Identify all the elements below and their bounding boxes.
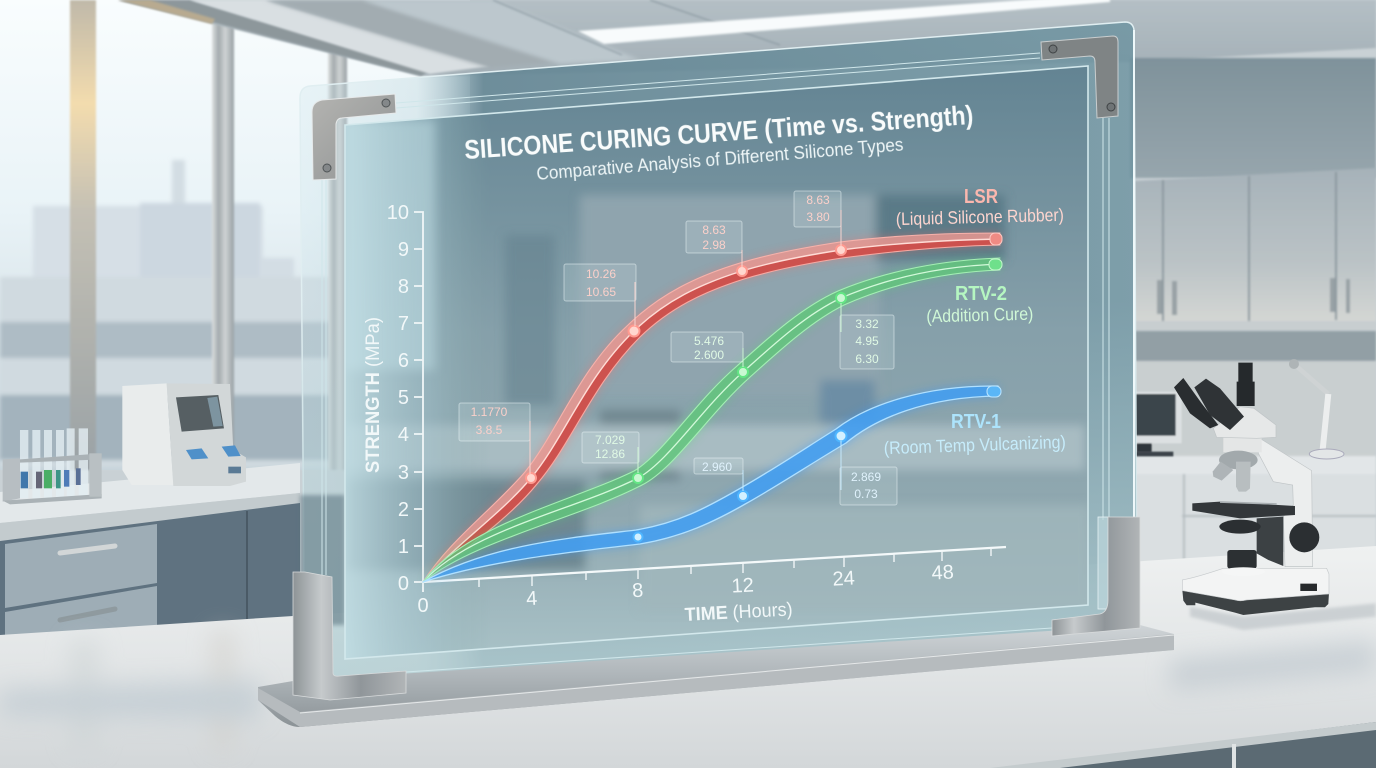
y axis: 7: [398, 313, 409, 335]
inner frame lines: [345, 66, 1088, 659]
y axis: 5: [398, 387, 409, 409]
y axis: 10: [387, 202, 409, 224]
callout: LSR 4h: 3.8.5: [476, 423, 503, 437]
callout: LSR 12h: 2.98: [702, 238, 726, 252]
wall cabinets: [1134, 168, 1376, 331]
callout: RTV-1 24h: 2.869: [851, 470, 881, 484]
bracket: top-left: [312, 94, 396, 180]
y axis: 0: [398, 573, 409, 595]
callout: LSR 24h: 8.63: [806, 193, 830, 207]
series label: RTV-2: RTV-2: [955, 283, 1007, 305]
inner chart surface: [340, 60, 1095, 665]
bracket: top-right: [1041, 36, 1118, 118]
callout: RTV-2 8h: 12.86: [595, 447, 625, 461]
series label: LSR: LSR: [964, 186, 998, 208]
ceiling: [118, 0, 1376, 76]
chart: strength vs time: [363, 100, 1066, 626]
backsplash and rear counter: [1134, 331, 1376, 574]
callout: RTV-1 24h: [840, 441, 897, 505]
callout: RTV-2 24h: 6.30: [855, 352, 879, 366]
callout: LSR 12h: 8.63: [702, 223, 726, 237]
bracket: bottom-right: [1052, 517, 1140, 636]
x axis: 4: [526, 588, 538, 610]
x axis label: TIME (Hours): [684, 599, 793, 626]
callout: RTV-2 8h: 7.029: [595, 433, 625, 447]
callout: RTV-2 24h: 3.32: [855, 317, 879, 331]
callout: RTV-2 24h: 4.95: [855, 334, 879, 348]
x axis: [417, 547, 1006, 617]
curve: RTV-2: [423, 258, 1002, 582]
callout: LSR 8h: [564, 264, 636, 326]
callout: RTV-2 12h: 2.600: [694, 348, 724, 362]
callout: LSR 24h: 3.80: [806, 210, 830, 224]
foreground counter: [0, 546, 1376, 768]
outer glass pane: [300, 22, 1137, 690]
monitor: [1135, 392, 1182, 456]
series label: RTV-1: RTV-1: [951, 411, 1001, 433]
window with skyline: [0, 0, 470, 470]
callout: LSR 8h: 10.26: [586, 267, 616, 281]
callout: RTV-1 12h: [694, 458, 743, 491]
callout: LSR 4h: [459, 403, 530, 474]
series label: LSR: [896, 186, 1064, 229]
callout: RTV-2 24h: [840, 303, 894, 369]
series label: RTV-1: [883, 411, 1066, 458]
subtitle: Comparative Analysis of Different Silicone Types: [536, 135, 904, 184]
callout: LSR 12h: [686, 221, 742, 267]
y axis: 6: [398, 350, 409, 372]
callout: LSR 8h: 10.65: [586, 285, 616, 299]
analyzer instrument: [122, 383, 246, 486]
curve: RTV-1: [423, 386, 1001, 582]
y axis: 4: [398, 424, 409, 446]
series label: LSR: (Liquid Silicone Rubber): [896, 205, 1064, 229]
callout: RTV-1 24h: 0.73: [854, 487, 878, 501]
y axis: 8: [398, 276, 409, 298]
series label: RTV-1: (Room Temp Vulcanizing): [883, 432, 1066, 458]
ceiling light: [578, 0, 1110, 44]
series label: RTV-2: [926, 283, 1034, 326]
base plate: [258, 625, 1174, 727]
lower glass tint: [300, 300, 1137, 690]
y axis: [387, 202, 423, 595]
test tube rack: [3, 428, 102, 504]
callout: RTV-1 12h: 2.960: [702, 460, 732, 474]
x axis: 48: [931, 561, 954, 585]
curve: LSR: [423, 233, 1002, 582]
x axis: 0: [417, 595, 429, 617]
callout: RTV-2 12h: 5.476: [694, 334, 724, 348]
y axis label: STRENGTH (MPa): [363, 317, 384, 473]
desk lamp: [1289, 359, 1344, 459]
y axis: 2: [398, 499, 409, 521]
microscope: [1174, 363, 1376, 630]
callout: RTV-2 8h: [582, 432, 639, 473]
title: SILICONE CURING CURVE (Time vs. Strength): [463, 100, 974, 165]
x axis: 12: [731, 574, 754, 598]
callout: LSR 4h: 1.1770: [471, 405, 508, 419]
bracket: bottom-left: [293, 572, 406, 700]
y axis: 3: [398, 462, 409, 484]
right wall: [1130, 58, 1376, 178]
y axis: 9: [398, 239, 409, 261]
callout: RTV-2 12h: [671, 332, 743, 367]
left edge shading: [300, 495, 345, 625]
series label: RTV-2: (Addition Cure): [926, 304, 1034, 326]
left bench: [0, 463, 300, 640]
callout: LSR 24h: [794, 191, 841, 246]
x axis: 24: [832, 567, 855, 591]
glass panel: [300, 22, 1137, 690]
x axis: 8: [632, 580, 644, 602]
y axis: 1: [398, 536, 409, 558]
